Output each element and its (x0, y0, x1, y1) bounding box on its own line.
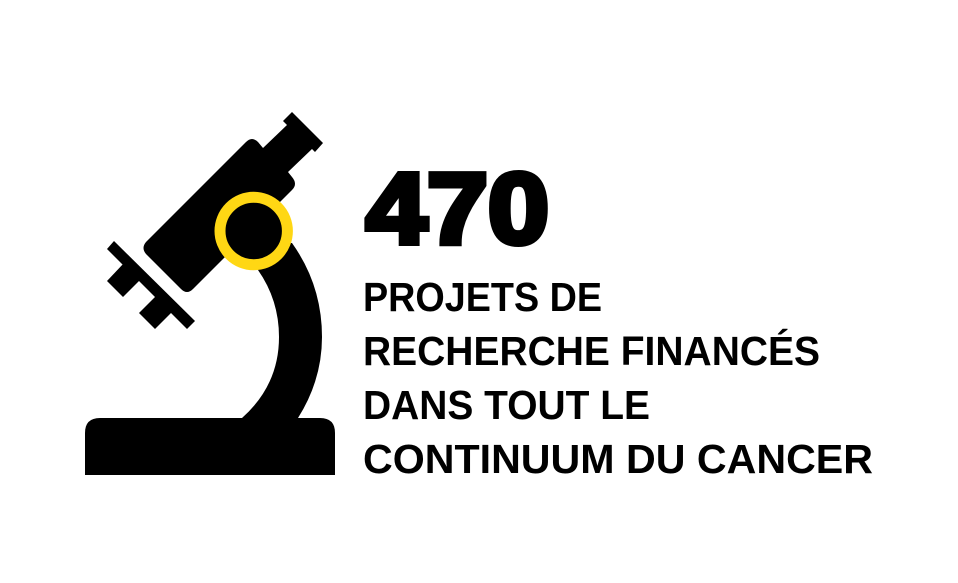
stage clip right (139, 295, 173, 329)
description text (363, 274, 873, 482)
line 2: RECHERCHE FINANCÉS (363, 328, 820, 374)
icon: microscope (85, 112, 335, 475)
line 1: PROJETS DE (363, 274, 602, 320)
microscope body tube (144, 112, 323, 292)
microscope stage (107, 241, 195, 329)
yellow ring (220, 197, 287, 265)
stage clip left (107, 263, 141, 297)
line 4: CONTINUUM DU CANCER (363, 436, 873, 482)
big number: 470: 470 (366, 153, 549, 265)
line 3: DANS TOUT LE (363, 382, 650, 428)
microscope arm (238, 240, 322, 422)
microscope base (85, 418, 335, 475)
